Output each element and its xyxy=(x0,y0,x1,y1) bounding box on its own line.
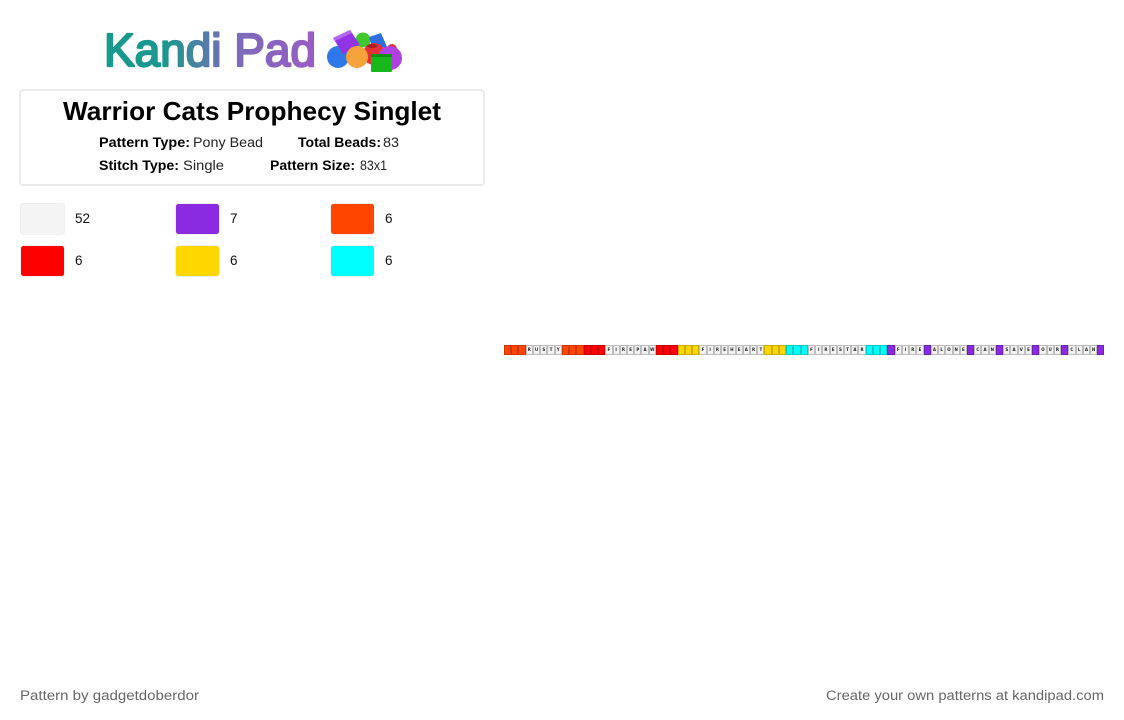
bead strip pattern: I xyxy=(818,347,819,352)
bead strip pattern: R xyxy=(716,347,719,352)
bead strip pattern: I xyxy=(615,347,617,352)
pattern details: 83 xyxy=(383,135,399,150)
bead strip pattern: N xyxy=(991,347,994,352)
bead strip pattern: E xyxy=(738,347,740,352)
bead strip pattern: F xyxy=(897,347,900,352)
bead strip pattern: A xyxy=(984,347,987,352)
logo wordmark: Kandi Pad xyxy=(104,24,316,76)
bead strip pattern: T xyxy=(550,347,552,352)
pattern details: Pony Bead xyxy=(193,135,263,150)
bead strip pattern: F xyxy=(810,347,813,352)
bead strip pattern: E xyxy=(962,347,965,352)
bead strip pattern: I xyxy=(905,347,906,352)
bead strip pattern: Y xyxy=(557,347,560,352)
bead strip pattern: S xyxy=(1005,347,1008,352)
bead strip pattern: P xyxy=(636,347,639,352)
pattern details: 83x1 xyxy=(360,158,387,173)
bead strip pattern: E xyxy=(629,347,632,352)
legend: colour counts: 52 xyxy=(75,211,90,226)
bead strip pattern: L xyxy=(1078,347,1080,352)
legend: colour counts: 7 xyxy=(230,211,238,226)
bead strip pattern: A xyxy=(933,347,936,352)
bead strip pattern: R xyxy=(622,347,625,352)
bead strip pattern: A xyxy=(1012,347,1016,352)
bead strip pattern: N xyxy=(1092,347,1095,352)
bead strip pattern: C xyxy=(1070,347,1073,352)
bead strip pattern: F xyxy=(608,347,610,352)
bead strip pattern: O xyxy=(1041,347,1045,352)
pattern details: Total Beads: xyxy=(298,135,381,150)
bead strip pattern: A xyxy=(644,347,647,352)
legend: colour counts xyxy=(20,204,393,276)
pattern details xyxy=(99,135,399,173)
pattern details: Single xyxy=(183,158,224,173)
bead strip pattern: E xyxy=(919,347,921,352)
bead strip pattern: N xyxy=(954,347,958,352)
panel: pattern info xyxy=(20,90,484,185)
icon: pile of beads xyxy=(327,30,402,72)
bead strip pattern: R xyxy=(861,347,864,352)
bead strip pattern: F xyxy=(702,347,704,352)
bead strip pattern: A xyxy=(1085,347,1088,352)
legend: colour counts: 6 xyxy=(75,253,83,268)
footer link: Create your own patterns at kandipad.com xyxy=(826,688,1104,703)
legend: colour counts: 6 xyxy=(230,253,238,268)
bead strip pattern: S xyxy=(542,347,545,352)
bead strip pattern: T xyxy=(759,347,762,352)
title: Warrior Cats Prophecy Singlet xyxy=(63,96,441,126)
bead strip pattern: V xyxy=(1020,347,1023,352)
bead strip pattern: L xyxy=(940,347,943,352)
bead strip pattern: E xyxy=(832,347,835,352)
bead strip pattern: T xyxy=(846,347,849,352)
bead strip pattern: I xyxy=(709,347,711,352)
bead strip pattern: W xyxy=(650,347,655,352)
bead strip pattern: U xyxy=(1049,347,1052,352)
bead strip pattern: R xyxy=(752,347,755,352)
pattern details: Pattern Size: xyxy=(270,158,355,173)
legend: colour counts: 6 xyxy=(385,211,393,226)
bead strip pattern: A xyxy=(745,347,748,352)
bead strip pattern: C xyxy=(976,347,979,352)
bead strip pattern: E xyxy=(723,347,726,352)
bead strip pattern: R xyxy=(824,347,827,352)
bead strip pattern: E xyxy=(1027,347,1030,352)
bead strip pattern: H xyxy=(730,347,734,352)
bead strip pattern: U xyxy=(535,347,538,352)
bead strip pattern: A xyxy=(853,347,856,352)
bead strip pattern: R xyxy=(911,347,914,352)
pattern details: Stitch Type: xyxy=(99,158,179,173)
footer credit: Pattern by gadgetdoberdor xyxy=(20,688,200,703)
bead strip pattern: O xyxy=(947,347,951,352)
bead strip pattern xyxy=(504,345,1104,355)
legend: colour counts: 6 xyxy=(385,253,393,268)
bead strip pattern: R xyxy=(1056,347,1059,352)
pattern details: Pattern Type: xyxy=(99,135,190,150)
bead strip pattern: R xyxy=(528,347,531,352)
bead strip pattern: S xyxy=(839,347,842,352)
